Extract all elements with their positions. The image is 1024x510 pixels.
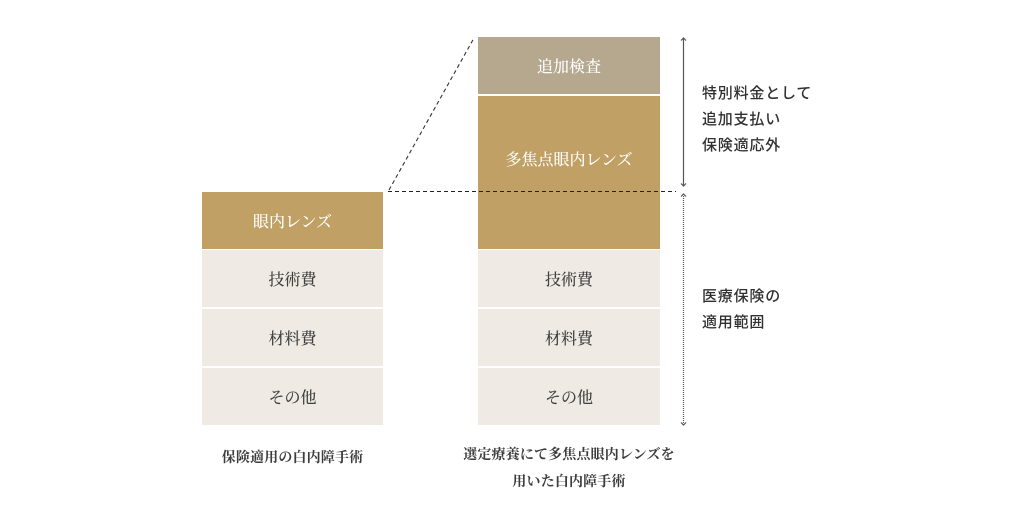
right block: technical fee xyxy=(478,250,660,307)
left block: intraocular lens: 眼内レンズ xyxy=(253,214,332,231)
left block: other: その他 xyxy=(268,390,316,407)
side label: covered by insurance: 適用範囲 xyxy=(702,314,765,331)
arrow: insurance covered range xyxy=(681,194,686,425)
side label: covered by insurance: 医療保険の xyxy=(702,288,781,305)
side label: billed separately: 保険適応外 xyxy=(702,137,781,154)
caption: left column: 保険適用の白内障手術 xyxy=(222,451,363,466)
horizontal dashed boundary line xyxy=(388,190,676,192)
side label: billed separately xyxy=(702,85,812,154)
right block: additional tests xyxy=(478,37,660,94)
left block: material fee: 材料費 xyxy=(268,331,316,348)
arrow: outside insurance range xyxy=(681,38,686,186)
right block: other: その他 xyxy=(545,390,593,407)
side label: billed separately: 追加支払い xyxy=(702,111,781,128)
left block: technical fee: 技術費 xyxy=(268,272,316,289)
side label: billed separately: 特別料金として xyxy=(702,85,812,102)
caption: right column xyxy=(463,446,675,490)
left block: technical fee xyxy=(202,250,383,307)
right block: multifocal intraocular lens: 多焦点眼内レンズ xyxy=(505,152,633,169)
caption: right column: 用いた白内障手術 xyxy=(512,475,626,490)
right column: multifocal lens surgery stack xyxy=(478,37,660,425)
right block: material fee xyxy=(478,309,660,366)
left block: material fee xyxy=(202,309,383,366)
side label: covered by insurance xyxy=(702,288,781,331)
left block: intraocular lens xyxy=(202,192,383,249)
diagonal dashed connector xyxy=(389,38,474,190)
left block: other xyxy=(202,368,383,425)
right block: other xyxy=(478,368,660,425)
left column: standard cataract surgery stack xyxy=(202,192,383,425)
caption: right column: 選定療養にて多焦点眼内レンズを xyxy=(463,448,675,463)
right block: additional tests: 追加検査 xyxy=(537,59,601,76)
right block: material fee: 材料費 xyxy=(545,331,593,348)
right block: technical fee: 技術費 xyxy=(545,272,593,289)
right block: multifocal intraocular lens xyxy=(478,96,660,249)
